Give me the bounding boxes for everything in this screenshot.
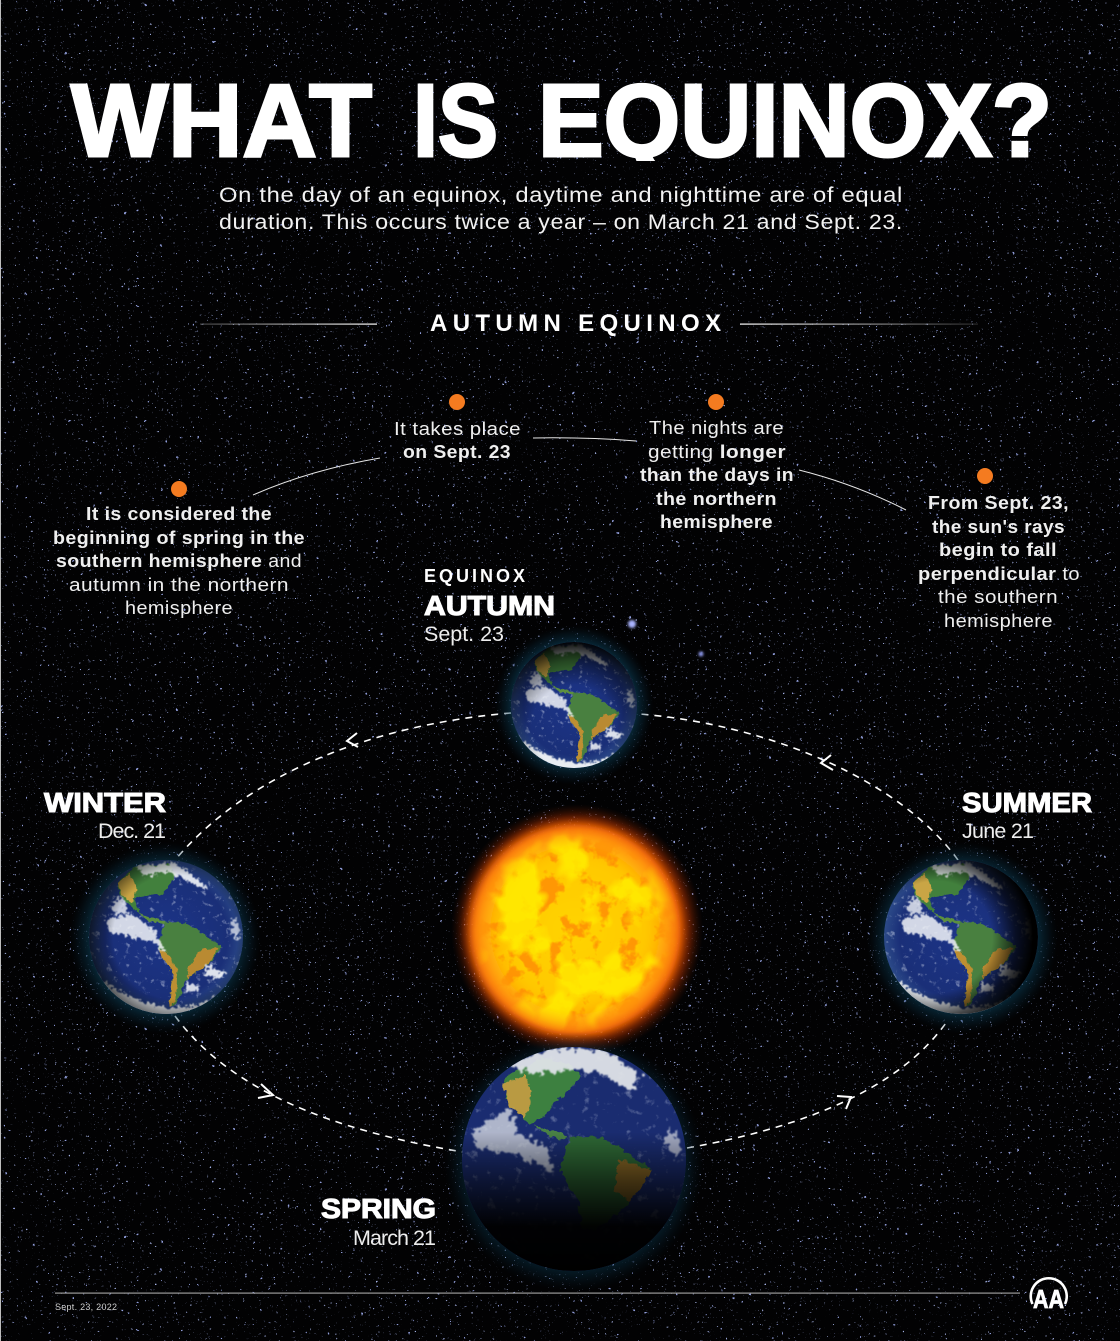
label: winter: Dec. 21 <box>98 819 166 843</box>
label: summer: SUMMER <box>962 787 1092 818</box>
callout: nights getting longer <box>640 394 794 532</box>
earth: spring position <box>444 1032 704 1292</box>
callout: sun's rays perpendicular: hemisphere <box>944 611 1053 631</box>
callout: sun's rays perpendicular: the sun's rays <box>932 517 1065 537</box>
callout: takes place on Sept. 23 <box>394 394 521 462</box>
footer rule and date: Sept. 23, 2022 <box>55 1302 117 1312</box>
callout: nights getting longer: hemisphere <box>660 512 773 532</box>
label: winter: WINTER <box>44 787 166 818</box>
label: spring: SPRING <box>321 1193 436 1224</box>
label: equinox autumn: EQUINOX <box>424 566 525 586</box>
earth: summer position <box>866 842 1058 1034</box>
callout: sun's rays perpendicular: the southern <box>938 587 1058 607</box>
label: equinox autumn: AUTUMN <box>424 590 555 621</box>
label: summer <box>962 787 1092 843</box>
label: spring <box>321 1193 436 1250</box>
callout: nights getting longer: getting longer <box>648 442 786 462</box>
callout: sun's rays perpendicular: begin to fall <box>939 540 1057 560</box>
title: IS <box>413 63 498 178</box>
callout: beginning of spring: hemisphere <box>125 598 233 618</box>
section heading: autumn equinox: AUTUMN EQUINOX <box>430 310 721 337</box>
logo: AA: AA <box>1033 1284 1064 1314</box>
callout: nights getting longer: the northern <box>656 489 777 509</box>
callout: nights getting longer: The nights are <box>649 418 784 438</box>
callout connectors <box>253 438 906 510</box>
label: summer: June 21 <box>962 819 1034 843</box>
callout: sun's rays perpendicular <box>918 468 1080 631</box>
title: WHAT <box>71 63 372 178</box>
callout: beginning of spring: southern hemisphere and <box>56 551 302 571</box>
subtitle: On the day of an equinox, daytime and nighttime are of equal <box>219 184 903 207</box>
subtitle <box>219 184 903 234</box>
title: EQUINOX? <box>538 63 1052 178</box>
callout: nights getting longer: than the days in <box>640 465 794 485</box>
title <box>69 82 1048 161</box>
callout: takes place on Sept. 23: on Sept. 23 <box>403 442 511 462</box>
subtitle: duration. This occurs twice a year – on March 21 and Sept. 23. <box>219 211 903 234</box>
callout: takes place on Sept. 23: It takes place <box>394 419 521 439</box>
orbit path with arrows <box>175 713 958 1152</box>
label: equinox autumn: Sept. 23 <box>424 622 504 646</box>
callout: sun's rays perpendicular: perpendicular to <box>918 564 1080 584</box>
callout: beginning of spring: beginning of spring in the <box>53 528 305 548</box>
earth: winter position <box>69 842 261 1034</box>
label: spring: March 21 <box>353 1226 436 1250</box>
earth: autumn equinox position <box>494 625 654 785</box>
callout: sun's rays perpendicular: From Sept. 23, <box>928 493 1069 513</box>
label: winter <box>44 787 166 843</box>
callout: beginning of spring: autumn in the northern <box>69 575 289 595</box>
label: equinox autumn <box>424 566 555 646</box>
callout: beginning of spring <box>53 481 305 618</box>
sun <box>451 804 703 1056</box>
callout: beginning of spring: It is considered the <box>86 504 272 524</box>
